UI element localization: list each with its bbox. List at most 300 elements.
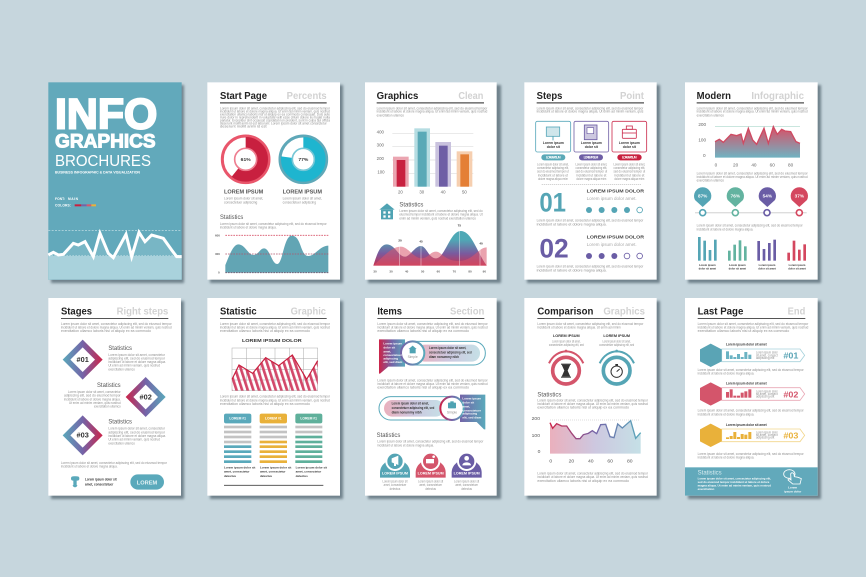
heading: Stages xyxy=(61,307,92,318)
step 01 xyxy=(537,188,644,227)
stage diamond 03 xyxy=(63,415,103,455)
intro text: deserunt mollit anim id est xyxy=(220,124,267,128)
heading: Graphics xyxy=(603,307,645,318)
step card 1: Lorem ipsum xyxy=(543,141,564,145)
intro text: Lorem ipsum dolor sit amet, consectetur adipiscing elit, sed do eiusmod tempor xyxy=(377,322,488,326)
text block: incididunt ut labore et dolore magna aliqua. xyxy=(698,412,754,416)
font and colours legend: FONT: xyxy=(55,197,65,201)
table column: teal: LOREM #1 xyxy=(229,417,246,421)
ribbon 03: #03 xyxy=(783,432,799,441)
heading xyxy=(377,91,484,104)
statistics heading and text: Lorem ipsum dolor sit amet, consectetur adipiscing elit, sed do eiusmod tempor xyxy=(220,222,327,226)
text block: incididunt ut labore et dolore magna aliqua. Ut enim ad minim veniam, quis nostrud xyxy=(537,475,648,479)
intro text: incididunt ut labore et dolore magna aliqua. Ut enim ad minim veniam, quis nostrud xyxy=(220,109,330,113)
text block: Lorem ipsum dolor sit amet, consectetur adipiscing elit, sed do eiusmod tempor xyxy=(698,452,804,456)
panel: last page xyxy=(685,298,818,496)
heading xyxy=(220,307,327,319)
statistics heading and text: Lorem ipsum dolor sit amet, consectetur adipiscing elit, sed do eiusmod tempor xyxy=(377,440,484,444)
page sheet xyxy=(207,82,340,280)
cover title: BROCHURES xyxy=(55,153,151,170)
intro text xyxy=(61,322,173,333)
intro text: Lorem ipsum dolor sit amet, consectetur adipiscing elit, sed do eiusmod tempor xyxy=(220,322,331,326)
ribbon 02: adipiscing elit xyxy=(756,395,774,399)
hatched line chart xyxy=(232,348,318,391)
gauge: hourglass: consectetuer adipiscing elit, sed xyxy=(549,343,584,347)
table column: yellow: Lorem ipsum dolor sit xyxy=(260,465,291,469)
stage 03 text xyxy=(108,420,166,446)
step card 1: consectetur adipiscing elit, xyxy=(537,166,569,170)
area line chart: 100 xyxy=(532,433,540,439)
ribbon 02: Lorem ipsum dolor sit amet xyxy=(726,382,767,386)
statistics heading and text: Lorem ipsum dolor sit amet, consectetur adipiscing elit, sed do eiusmod tempor xyxy=(537,399,649,403)
gauge: hourglass: Lorem ipsum dolor sit amet, xyxy=(552,339,581,343)
table column: green: amet, consectetur xyxy=(296,470,322,474)
gauge: stopwatch xyxy=(599,334,634,384)
icon badge: megaphone: Lorem ipsum dolor sit xyxy=(382,479,408,483)
text block xyxy=(220,395,331,406)
area line chart: 80 xyxy=(627,459,633,465)
ribbon 01: adipiscing elit xyxy=(756,356,774,360)
ribbon 01: Lorem ipsum dolor xyxy=(756,351,778,355)
step 02 xyxy=(537,234,644,273)
small bar charts xyxy=(698,237,806,270)
heading: Infographic xyxy=(751,91,804,102)
icon: cloud download xyxy=(71,476,79,488)
gauge: stopwatch: Lorem ipsum dolor sit amet, xyxy=(602,339,631,343)
intro text: Lorem ipsum dolor sit amet, consectetur adipiscing elit, sed do eiusmod tempor xyxy=(537,322,644,326)
donut chart: 61% xyxy=(222,136,269,183)
cover line chart xyxy=(48,230,182,280)
icon: house xyxy=(379,203,395,219)
intro text: exercitation ullamco laboris nisi ut aliquip ex ea commodo consequat. Duis aute xyxy=(220,112,330,116)
area line chart: 0 xyxy=(549,459,552,465)
callout item 1 xyxy=(379,339,485,374)
statistics heading and text: Statistics xyxy=(377,433,400,439)
page sheet xyxy=(48,298,181,496)
step card 3: consectetur adipiscing elit, xyxy=(613,166,645,170)
bar chart: 50 xyxy=(462,190,467,195)
text block: incididunt ut labore et dolore magna aliqua. Ut enim ad minim veniam, quis nostrud xyxy=(697,175,808,179)
stage 01 text: adipiscing elit, sed do eiusmod tempor xyxy=(108,356,166,360)
text block xyxy=(537,471,649,483)
panel: steps xyxy=(524,82,657,280)
text block: Lorem ipsum dolor sit amet, consectetur adipiscing elit, sed do eiusmod tempor xyxy=(377,378,488,382)
area chart: 20 xyxy=(733,163,739,168)
step 01: Lorem ipsum dolor sit amet, consectetur adipiscing elit, sed do eiusmod tempor xyxy=(537,219,644,223)
table column: teal: delectus xyxy=(224,474,236,478)
intro text: irure dolor in reprehenderit in voluptate velit esse cillum dolore eu fugiat nulla xyxy=(220,115,330,119)
donut captions: consectetuer adipiscing xyxy=(283,200,316,204)
text block: Lorem ipsum dolor sit amet, consectetur adipiscing elit, sed do eiusmod tempor xyxy=(697,172,809,176)
table column: teal: Lorem ipsum dolor sit xyxy=(224,465,255,469)
text block: incididunt ut labore et dolore magna aliqua. xyxy=(698,456,754,460)
gauge: hourglass: LOREM IPSUM xyxy=(553,334,580,338)
bar chart: 100 xyxy=(377,169,385,174)
intro text: exercitation ullamco laboris nisi ut aliquip ex ea commodo xyxy=(377,329,469,333)
table column: green: LOREM #1 xyxy=(300,417,317,421)
footer band: ipsum dolor xyxy=(784,489,802,493)
small bar charts: dolor sit amet xyxy=(758,266,776,270)
layered area chart: 30 xyxy=(389,269,393,273)
area line chart: 200 xyxy=(532,416,540,422)
area chart: 100 xyxy=(698,138,707,143)
ribbon 02 xyxy=(700,382,805,406)
area chart: 40 xyxy=(751,163,757,168)
statistics heading and text: exercitation ullamco laboris nisi ut aliquip ex ea commodo xyxy=(537,406,629,410)
callout item 2: consectetuer xyxy=(462,408,482,412)
donut captions: Lorem ipsum dolor sit amet, xyxy=(283,196,322,200)
footer note: amet, consectetuer xyxy=(85,482,114,486)
ribbon 01: Lorem ipsum dolor sit amet xyxy=(726,343,767,347)
step 01: Lorem ipsum dolor amet. xyxy=(587,196,637,201)
table column: yellow xyxy=(260,414,291,478)
intro text xyxy=(697,106,809,117)
table column: yellow: delectus xyxy=(260,474,272,478)
layered area chart: 60 xyxy=(437,269,440,273)
stage 01 text xyxy=(108,346,166,372)
intro text: exercitation ullamco laboris nisi ut aliquip ex ea commodo xyxy=(61,329,151,333)
step card 2: Lorem ipsum dolor sit amet, xyxy=(575,163,607,167)
stage diamond 03: #03 xyxy=(77,431,89,440)
stage 03 text: Statistics xyxy=(108,420,132,426)
text block xyxy=(698,452,804,460)
stage 03 text: exercitation ullamco xyxy=(108,442,135,446)
statistics heading and text xyxy=(377,433,484,447)
heading: Right steps xyxy=(117,307,169,318)
bar chart: 40 xyxy=(441,190,446,195)
step 01: incididunt ut labore et dolore magna aliqua. xyxy=(537,223,607,227)
step card 2: dolore magna aliqua enim xyxy=(576,177,606,181)
intro text xyxy=(537,106,644,114)
font and colours legend xyxy=(55,197,96,207)
text block: Lorem ipsum dolor sit amet, consectetur adipiscing elit, sed do eiusmod tempor xyxy=(220,395,331,399)
icon badge: hand: Lorem ipsum dolor sit xyxy=(418,479,443,483)
footer band: magna aliqua. Ut enim ad minim veniam, quis nostrud xyxy=(698,483,771,487)
ribbon 01: #01 xyxy=(783,352,799,361)
layered area chart: 90 xyxy=(483,269,486,273)
icon badge: person xyxy=(452,452,482,491)
callout item 2: adipiscing xyxy=(462,412,477,416)
table column: green: delectus xyxy=(296,474,308,478)
statistics heading and text: incididunt ut labore et dolore magna aliqua. xyxy=(220,225,277,229)
intro text: Lorem ipsum dolor sit amet, consectetur adipiscing elit, sed do eiusmod tempor xyxy=(697,106,809,110)
panel: statistic xyxy=(207,298,340,496)
step card 2 xyxy=(574,121,609,181)
small bar charts: Lorem ipsum xyxy=(759,263,776,267)
callout item 1: consectetuer adipiscing elit, sed xyxy=(429,350,472,354)
callout item 2: Lorem ipsum xyxy=(462,397,481,401)
statistics heading and text: incididunt ut labore et dolore magna aliqua. xyxy=(377,443,434,447)
area chart: 0 xyxy=(218,270,220,274)
icon badge: hand: delectus xyxy=(425,487,436,491)
intro text xyxy=(220,106,331,128)
statistics text: enim ad minim veniam, quis nostrud exercitation ullamco xyxy=(399,216,476,220)
cover title: INFO xyxy=(55,90,157,138)
intro text xyxy=(698,322,809,333)
heading xyxy=(537,307,645,319)
layered area chart: 20 xyxy=(398,239,402,243)
text block: Lorem ipsum dolor sit amet, consectetur adipiscing elit, sed do eiusmod tempor xyxy=(537,471,649,475)
text block: Lorem ipsum dolor sit amet, consectetur adipiscing elit, sed do eiusmod tempor xyxy=(61,461,168,465)
text block: incididunt ut labore et dolore magna aliqua. xyxy=(698,372,754,376)
intro text xyxy=(220,322,331,333)
panel: stages xyxy=(48,298,181,496)
ribbon 02: Lorem ipsum dolor xyxy=(756,389,778,393)
page sheet xyxy=(524,82,657,280)
area chart xyxy=(215,233,328,274)
step 02: LOREM IPSUM DOLOR xyxy=(587,235,644,241)
heading: Steps xyxy=(537,91,563,102)
step card 2: sed do eiusmod tempor ut xyxy=(575,170,607,174)
page sheet xyxy=(685,298,818,496)
step card 2: dolor sit xyxy=(585,145,599,149)
button: LOREM xyxy=(130,474,164,490)
ribbon 03: Lorem ipsum dolor sit amet xyxy=(726,423,767,427)
statistics text: Lorem ipsum dolor sit amet, consectetur adipiscing elit, sed do xyxy=(399,209,483,213)
statistics heading and text xyxy=(220,215,327,229)
panel: modern xyxy=(685,82,818,280)
font and colours legend: COLORS: xyxy=(55,203,71,207)
footer band: Statistics xyxy=(698,470,722,476)
step card 1: dolore magna aliqua enim xyxy=(538,177,568,181)
statistics text: eiusmod tempor incididunt ut labore et dolore magna aliqua. Ut xyxy=(399,213,483,217)
statistics text: Statistics xyxy=(399,203,423,209)
text block xyxy=(61,461,168,469)
text block: incididunt ut labore et dolore magna aliqua. Ut enim ad minim veniam, quis nostrud xyxy=(377,382,488,386)
footer band: sed do eiusmod tempor incididunt ut labore et dolore xyxy=(698,480,770,484)
gauge: stopwatch: LOREM IPSUM xyxy=(603,334,630,338)
intro text: Lorem ipsum dolor sit amet, consectetur adipiscing elit, sed do eiusmod tempor xyxy=(698,322,809,326)
footer band: Lorem xyxy=(788,485,798,489)
layered area chart: 40 xyxy=(405,269,409,273)
bar chart: 20 xyxy=(398,190,403,195)
area chart: 0 xyxy=(703,153,706,158)
callout item 2: amet, xyxy=(462,405,470,409)
area chart: 60 xyxy=(770,163,775,168)
small bar charts: Lorem ipsum xyxy=(699,263,716,267)
intro text: incididunt ut labore et dolore magna aliqua. Ut enim ad minim veniam, quis nostrud xyxy=(698,325,808,329)
step card 1: Lorem ipsum dolor sit amet, xyxy=(537,163,569,167)
heading: Start Page xyxy=(220,91,267,102)
heading: Graphic xyxy=(291,307,326,318)
intro text xyxy=(377,106,488,117)
footer note xyxy=(85,478,117,486)
area line chart xyxy=(532,416,641,465)
stage diamond 01 xyxy=(63,340,103,380)
step card 1: incididunt ut labore et xyxy=(538,173,568,177)
heading xyxy=(220,91,327,104)
text block: Lorem ipsum dolor sit amet, consectetur adipiscing elit, sed do eiusmod tempor xyxy=(698,409,804,413)
heading xyxy=(698,307,805,319)
stage 02 text: exercitation ullamco xyxy=(94,405,121,409)
statistics heading and text xyxy=(537,393,649,410)
step 02: incididunt ut labore et dolore magna aliqua. xyxy=(537,269,607,273)
small bar charts: Lorem ipsum xyxy=(789,263,806,267)
heading xyxy=(61,307,169,319)
intro text: Lorem ipsum dolor sit amet, consectetur adipiscing elit, sed do eiusmod tempor xyxy=(537,106,644,110)
page sheet xyxy=(524,298,657,496)
step card 3: dolore magna aliqua enim xyxy=(614,177,644,181)
statistics heading and text: Statistics xyxy=(537,393,561,399)
statistics heading and text: incididunt ut labore et dolore magna aliqua. Ut enim ad minim veniam, quis nostrud xyxy=(537,402,648,406)
stage 03 text: adipiscing elit, sed do eiusmod tempor xyxy=(108,430,166,434)
text block: exercitation ullamco xyxy=(697,179,724,183)
intro text: Lorem ipsum dolor sit amet, consectetur adipiscing elit, sed do eiusmod tempor xyxy=(220,106,331,110)
step 02: Lorem ipsum dolor amet. xyxy=(587,242,637,247)
layered area chart xyxy=(373,224,487,273)
table column: yellow: LOREM #1 xyxy=(265,417,282,421)
icon badge: hand xyxy=(416,452,446,491)
stage 01 text: Ut enim ad minim veniam, quis nostrud xyxy=(108,364,160,368)
layered area chart: 45 xyxy=(419,240,423,244)
table column: yellow: amet, consectetur xyxy=(260,470,286,474)
step 01: 01 xyxy=(539,188,566,218)
area line chart: 20 xyxy=(569,459,574,465)
bar chart: 200 xyxy=(377,156,384,161)
stage 03 text: Ut enim ad minim veniam, quis nostrud xyxy=(108,438,160,442)
text block xyxy=(697,224,803,231)
callout item 2: Lorem ipsum dolor sit amet, xyxy=(392,402,429,406)
step card 3: dolor sit xyxy=(623,145,637,149)
heading xyxy=(697,91,804,104)
panel: items xyxy=(365,298,497,496)
icon badge: person: delectus xyxy=(461,487,472,491)
donut chart: 77% xyxy=(280,136,327,183)
layered area chart: 30 xyxy=(373,269,377,273)
heading: Section xyxy=(450,307,484,318)
panel: comparison xyxy=(524,298,657,496)
ribbon 03: adipiscing elit xyxy=(756,436,774,440)
callout item 1: elit, sed diam xyxy=(383,360,403,364)
area chart: 600 xyxy=(215,233,220,237)
step 02: Lorem ipsum dolor sit amet, consectetur adipiscing elit, sed do eiusmod tempor xyxy=(537,265,644,269)
timeline with percent pins: 54% xyxy=(763,194,773,199)
panel: cover xyxy=(48,82,182,280)
footer note: Lorem ipsum dolor sit xyxy=(85,478,117,482)
callout item 1: Simple xyxy=(408,355,418,359)
intro text: exercitation ullamco xyxy=(377,113,404,117)
heading: Percents xyxy=(287,91,327,102)
icon badge: person: LOREM IPSUM xyxy=(454,471,480,475)
area line chart: 40 xyxy=(588,459,594,465)
icon badge: hand: amet, consectetuer xyxy=(419,483,443,487)
timeline with percent pins xyxy=(694,187,808,216)
text block: Lorem ipsum dolor sit amet, consectetur adipiscing elit, sed do eiusmod tempor xyxy=(698,368,804,372)
statistics text xyxy=(399,203,483,220)
page sheet xyxy=(685,82,818,280)
step card 2: incididunt ut labore et xyxy=(576,173,606,177)
step card 3: LOREMIPSUM xyxy=(622,155,637,159)
icon badge: megaphone: delectus xyxy=(390,487,401,491)
page sheet xyxy=(365,298,497,496)
cover background xyxy=(48,82,182,280)
intro text: incididunt ut labore et dolore magna aliqua. Ut enim ad minim veniam, quis nostrud xyxy=(61,325,172,329)
ribbon 03: sit amet, consect xyxy=(756,433,778,437)
callout item 2 xyxy=(379,395,485,429)
intro text: Lorem ipsum dolor sit amet, consectetur adipiscing elit, sed do eiusmod tempor xyxy=(377,106,488,110)
text block: exercitation ullamco laboris nisi ut aliquip ex ea commodo xyxy=(537,479,629,483)
intro text: incididunt ut labore et dolore magna aliqua. Ut enim ad minim xyxy=(537,325,621,329)
donut chart: 77%: 77% xyxy=(298,157,309,163)
icon badge: person: Lorem ipsum dolor sit xyxy=(454,479,479,483)
callout item 2: elit, sed diam xyxy=(462,415,482,419)
footer band: Lorem ipsum dolor sit amet, consectetur adipiscing elit, xyxy=(698,477,771,481)
footer band: exercitation xyxy=(698,487,714,491)
intro text: exercitation ullamco laboris nisi ut aliquip ex ea commodo xyxy=(220,329,310,333)
intro text: incididunt ut labore et dolore magna aliqua. Ut enim ad minim veniam, quis nostrud xyxy=(377,110,487,114)
intro text: incididunt ut labore et dolore magna aliqua. Ut enim ad minim veniam, quis nostrud xyxy=(220,325,330,329)
cover title: BUSINESS INFOGRAPHIC & DATA VISUALIZATION xyxy=(55,170,141,174)
stage 03 text: Lorem ipsum dolor sit amet, consectetur xyxy=(108,427,166,431)
intro text: exercitation ullamco xyxy=(697,113,724,117)
intro text xyxy=(537,322,644,329)
callout item 1: adipiscing xyxy=(383,356,398,360)
stage 02 text: Lorem ipsum dolor sit amet, consectetur xyxy=(68,390,121,394)
heading xyxy=(377,307,484,319)
heading: Clean xyxy=(458,91,483,102)
small bar charts: dolor sit amet xyxy=(788,266,806,270)
callout item 1: consectetuer xyxy=(383,353,403,357)
intro text: pariatur. Excepteur sint occaecat cupidatat non proident, sunt in culpa qui officia xyxy=(220,118,330,122)
callout item 1: amet, xyxy=(383,349,391,353)
callout item 1: diam nonummy nibh xyxy=(429,355,459,359)
step 01: LOREM IPSUM DOLOR xyxy=(587,189,644,195)
icon badge: megaphone: amet, consectetuer xyxy=(384,483,407,487)
heading: Point xyxy=(620,91,645,102)
callout item 1: Lorem ipsum dolor sit amet, xyxy=(429,346,466,350)
callout item 2: diam nonummy nibh xyxy=(392,411,422,415)
text block xyxy=(698,409,804,416)
text block: Lorem ipsum dolor sit amet, consectetur adipiscing elit, sed do eiusmod tempor xyxy=(697,224,803,228)
timeline with percent pins: 37% xyxy=(795,194,805,199)
icon badge: hand: LOREM IPSUM xyxy=(418,471,444,475)
cover title: GRAPHICS xyxy=(55,132,156,153)
stage diamond 01: #01 xyxy=(77,355,89,364)
table column: green: Lorem ipsum dolor sit xyxy=(296,465,327,469)
donut captions: consectetuer adipiscing xyxy=(224,200,257,204)
intro text: exercitation ullamco laboris nisi ut aliquip ex ea commodo xyxy=(698,329,789,333)
bar chart: 300 xyxy=(377,143,384,148)
small bar charts: dolor sit amet xyxy=(699,266,716,270)
statistics heading and text: Statistics xyxy=(220,215,243,221)
area chart: 300 xyxy=(215,252,220,256)
bar chart: 400 xyxy=(377,130,384,135)
area line chart: 0 xyxy=(538,449,541,455)
page sheet xyxy=(365,82,497,280)
button: LOREM: LOREM xyxy=(137,480,157,486)
heading: Last Page xyxy=(698,307,744,318)
icon badge: person: amet, consectetuer xyxy=(455,483,479,487)
heading: Comparison xyxy=(537,307,593,318)
stage 02 text: Ut enim ad minim veniam, quis nostrud xyxy=(69,401,121,405)
intro text: incididunt ut labore et dolore magna aliqua. Ut enim ad minim veniam, quis nostrud xyxy=(697,110,808,114)
gauge: stopwatch: consectetuer adipiscing elit, sed xyxy=(599,343,634,347)
stage diamond 02 xyxy=(126,377,166,417)
stage 02 text xyxy=(64,383,122,409)
callout item 2: Simple xyxy=(447,411,457,415)
donut chart: 61%: 61% xyxy=(241,157,251,163)
ribbon 01: sit amet, consect xyxy=(756,353,778,357)
text block: incididunt ut labore et dolore magna aliqua. xyxy=(61,465,118,469)
text block xyxy=(698,368,804,376)
step card 1: LOREMIPSUM xyxy=(546,155,561,159)
heading: End xyxy=(788,307,805,318)
callout item 2: consectetuer adipiscing elit, sed xyxy=(392,406,434,410)
step card 1: dolor sit xyxy=(547,145,561,149)
stage 02 text: Statistics xyxy=(97,383,121,389)
area chart xyxy=(698,122,800,168)
ribbon 02: sit amet, consect xyxy=(756,392,778,396)
